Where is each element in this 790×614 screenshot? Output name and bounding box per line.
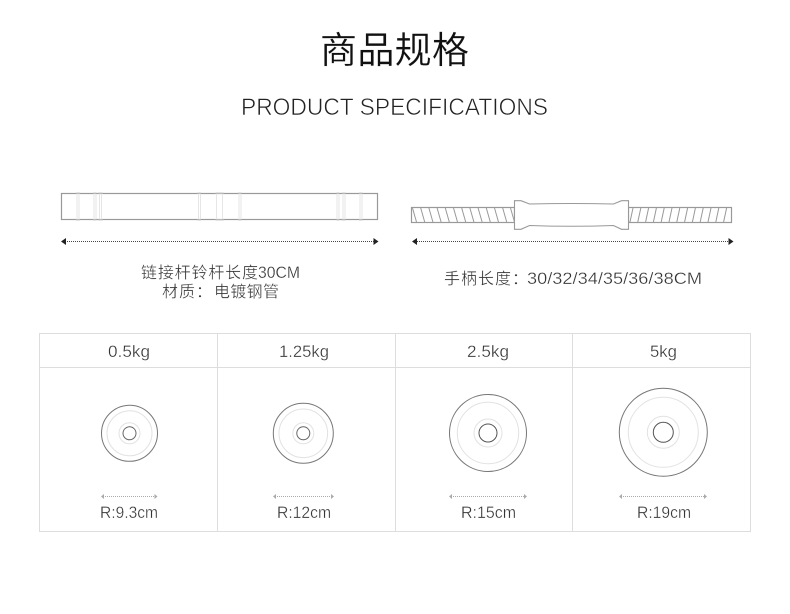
icon: connecting bar xyxy=(62,193,378,220)
table: plate sizes xyxy=(40,334,750,532)
dimension arrows xyxy=(101,494,707,499)
icon: threaded handle xyxy=(412,208,732,222)
weight labels: 5kg xyxy=(650,342,677,361)
plate: 1.25kg xyxy=(273,403,333,463)
caption: connecting bar: 电镀钢管 xyxy=(214,283,279,301)
arrow: handle length xyxy=(412,238,734,245)
radius labels: R:9.3cm xyxy=(100,503,158,522)
radius labels: R:12cm xyxy=(277,503,331,522)
radius labels: R:15cm xyxy=(461,503,516,522)
caption: connecting bar: 30CM xyxy=(258,263,300,282)
subtitle: PRODUCT SPECIFICATIONS xyxy=(241,94,548,121)
weight labels xyxy=(108,342,677,361)
caption: handle length: 手柄长度： xyxy=(444,270,528,288)
caption: handle length xyxy=(444,269,702,288)
caption: handle length: 30/32/34/35/36/38CM xyxy=(527,269,702,288)
grip xyxy=(514,201,628,229)
caption: connecting bar: 链接杆铃杆长度 xyxy=(141,264,258,282)
weight labels: 0.5kg xyxy=(108,342,150,361)
plate: 2.5kg xyxy=(450,394,526,472)
caption: connecting bar: 材质： xyxy=(162,283,212,301)
title: 商品规格 xyxy=(320,30,469,71)
weight labels: 1.25kg xyxy=(279,342,329,361)
arrow: connecting bar length xyxy=(61,238,378,245)
plate: 5kg xyxy=(619,388,707,476)
radius labels xyxy=(100,503,691,522)
weight labels: 2.5kg xyxy=(467,342,509,361)
plate: 0.5kg xyxy=(102,405,158,461)
radius labels: R:19cm xyxy=(637,503,691,522)
caption: connecting bar xyxy=(141,263,300,301)
